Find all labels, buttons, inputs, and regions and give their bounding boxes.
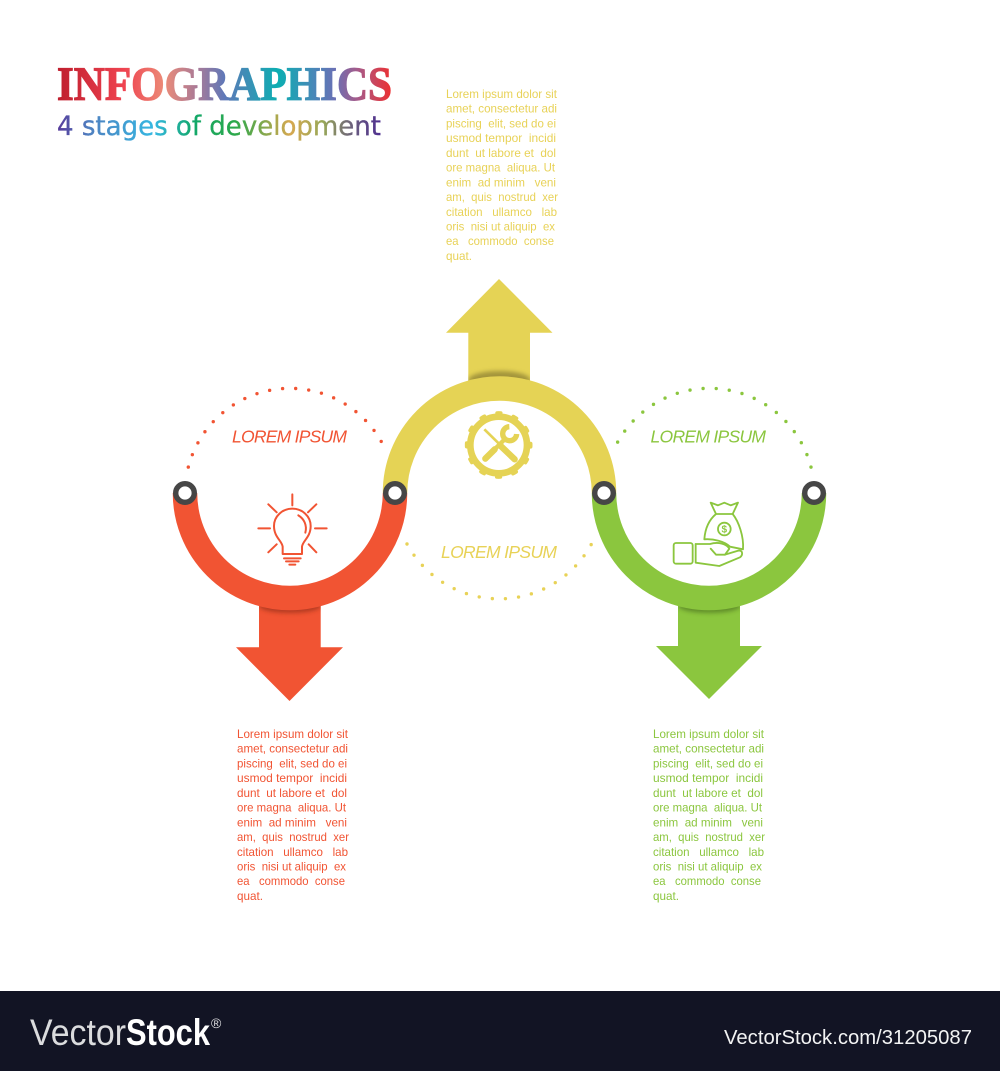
heading: green stage: LOREM IPSUM bbox=[650, 426, 766, 446]
text block: red stage: ea commodo conse bbox=[237, 874, 345, 888]
dotted arc: red bbox=[188, 388, 382, 467]
text block: red stage: am, quis nostrud xer bbox=[237, 830, 349, 844]
text block: yellow stage: enim ad minim veni bbox=[446, 175, 556, 189]
text block: red stage: quat. bbox=[237, 889, 263, 903]
footer logo: Stock bbox=[126, 1012, 210, 1053]
text block: green stage: am, quis nostrud xer bbox=[653, 830, 765, 844]
footer logo: Vector bbox=[30, 1012, 126, 1053]
text block: red stage: piscing elit, sed do ei bbox=[237, 756, 347, 770]
text block: green stage: dunt ut labore et dol bbox=[653, 786, 763, 800]
text block: yellow stage: dunt ut labore et dol bbox=[446, 146, 556, 160]
text block: yellow stage: ea commodo conse bbox=[446, 234, 554, 248]
text block: red stage: citation ullamco lab bbox=[237, 845, 348, 859]
text block: green stage: usmod tempor incidi bbox=[653, 771, 763, 785]
text block: green stage: ore magna aliqua. Ut bbox=[653, 801, 763, 815]
text block: green stage bbox=[653, 727, 765, 903]
text block: yellow stage: amet, consectetur adi bbox=[446, 102, 557, 116]
text block: green stage: ea commodo conse bbox=[653, 874, 761, 888]
text block: green stage: oris nisi ut aliquip ex bbox=[653, 860, 762, 874]
text block: yellow stage: citation ullamco lab bbox=[446, 205, 557, 219]
text block: green stage: Lorem ipsum dolor sit bbox=[653, 727, 765, 741]
text block: green stage: quat. bbox=[653, 889, 679, 903]
text block: yellow stage bbox=[446, 87, 558, 263]
icon: money bag in hand: $ bbox=[722, 525, 728, 536]
footer logo bbox=[30, 1012, 222, 1053]
text block: yellow stage: usmod tempor incidi bbox=[446, 131, 556, 145]
dotted arc: green bbox=[618, 388, 811, 467]
arc: yellow band bbox=[395, 389, 604, 493]
text block: red stage: Lorem ipsum dolor sit bbox=[237, 727, 349, 741]
text block: red stage: usmod tempor incidi bbox=[237, 771, 347, 785]
text block: green stage: citation ullamco lab bbox=[653, 845, 764, 859]
text block: red stage: enim ad minim veni bbox=[237, 815, 347, 829]
text block: green stage: piscing elit, sed do ei bbox=[653, 756, 763, 770]
icon: light bulb bbox=[258, 494, 327, 565]
footer image id: VectorStock.com/31205087 bbox=[724, 1027, 972, 1049]
text block: red stage: ore magna aliqua. Ut bbox=[237, 801, 347, 815]
text block: red stage: amet, consectetur adi bbox=[237, 742, 348, 756]
text block: yellow stage: am, quis nostrud xer bbox=[446, 190, 558, 204]
icon: money bag in hand bbox=[674, 503, 743, 566]
heading: yellow stage: LOREM IPSUM bbox=[441, 542, 557, 562]
text block: yellow stage: quat. bbox=[446, 249, 472, 263]
text block: red stage: dunt ut labore et dol bbox=[237, 786, 347, 800]
arrow: yellow up bbox=[446, 279, 552, 389]
text block: yellow stage: oris nisi ut aliquip ex bbox=[446, 220, 555, 234]
arc: green band bbox=[604, 493, 814, 598]
footer logo: ® bbox=[211, 1015, 222, 1031]
text block: red stage bbox=[237, 727, 349, 903]
text block: yellow stage: ore magna aliqua. Ut bbox=[446, 161, 556, 175]
title: INFOGRAPHICS bbox=[57, 58, 392, 111]
heading: red stage: LOREM IPSUM bbox=[232, 426, 347, 446]
arrow: red down bbox=[236, 599, 343, 701]
arrow: green down bbox=[656, 599, 762, 699]
text block: red stage: oris nisi ut aliquip ex bbox=[237, 860, 346, 874]
subtitle: 4 stages of development bbox=[57, 111, 381, 142]
text block: yellow stage: piscing elit, sed do ei bbox=[446, 116, 556, 130]
text block: green stage: enim ad minim veni bbox=[653, 815, 763, 829]
node rings bbox=[176, 484, 823, 502]
arc: red band bbox=[185, 493, 395, 598]
icon: gear with tools bbox=[467, 413, 531, 477]
dotted arc: yellow bbox=[407, 544, 592, 599]
text block: green stage: amet, consectetur adi bbox=[653, 742, 764, 756]
footer bar bbox=[0, 991, 1000, 1071]
text block: yellow stage: Lorem ipsum dolor sit bbox=[446, 87, 558, 101]
